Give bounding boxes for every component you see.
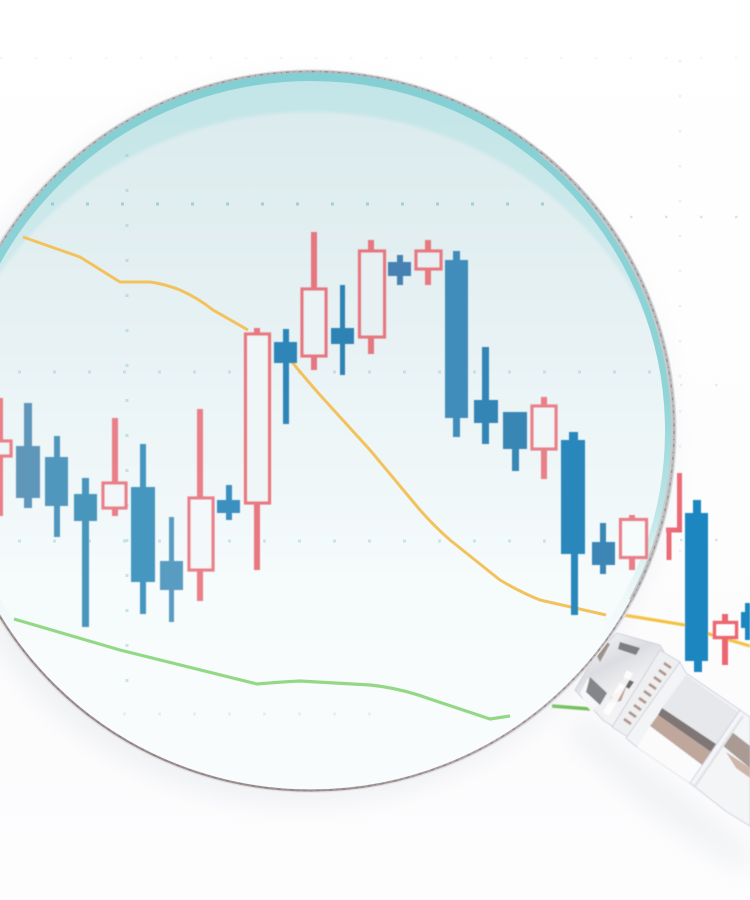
glass base bbox=[0, 71, 675, 791]
red candle 14 bbox=[360, 240, 384, 354]
handle shadow bbox=[575, 710, 750, 875]
blue candle 22 bbox=[592, 523, 615, 574]
blue candle outside lens bbox=[685, 500, 708, 672]
inner glass band bbox=[0, 81, 643, 310]
blue candle 17 bbox=[445, 251, 468, 437]
red candle 10 bbox=[246, 328, 270, 570]
blue candle 3 bbox=[45, 436, 68, 537]
red candle 5 bbox=[103, 418, 126, 516]
green moving average outside lens bbox=[552, 706, 590, 709]
blue candle 19 bbox=[503, 412, 527, 471]
blue candle 18 bbox=[474, 347, 498, 444]
yellow moving average in lens bbox=[23, 237, 606, 615]
dot grid inside lens bbox=[18, 154, 660, 714]
silver rim on right side bbox=[540, 152, 674, 600]
lens shadow bbox=[0, 82, 668, 802]
red candle 16 bbox=[416, 240, 441, 285]
handle barrel bbox=[626, 662, 740, 783]
blue candle 7 bbox=[160, 517, 183, 622]
blue candle 4 bbox=[74, 478, 97, 627]
handle collar bbox=[575, 633, 667, 733]
knurled ring bbox=[612, 650, 680, 737]
red candle 8 bbox=[189, 409, 213, 601]
blue candle 2 bbox=[16, 403, 40, 508]
teal edge ring bbox=[0, 72, 672, 598]
blue candle 13 bbox=[331, 285, 354, 375]
blue candle 6 bbox=[131, 444, 155, 614]
blue candle 15 bbox=[388, 255, 411, 285]
green moving average in lens bbox=[14, 619, 510, 719]
red candle 1 bbox=[0, 398, 11, 516]
bottom glass fill bbox=[0, 640, 690, 800]
red candle 20 bbox=[532, 397, 556, 479]
rim speckles bbox=[0, 72, 674, 790]
blue candle 21 bbox=[561, 432, 585, 615]
red hollow candle outside lens bbox=[714, 614, 736, 665]
red candle 23 bbox=[620, 515, 646, 570]
red candle distorted by lens edge bbox=[666, 473, 680, 560]
yellow moving average outside lens bbox=[605, 612, 750, 646]
chart outside the lens bbox=[552, 473, 750, 709]
dot grid on paper bbox=[0, 58, 750, 560]
blue candle at right edge bbox=[741, 603, 750, 640]
handle end section bbox=[690, 710, 750, 826]
main glass surface bbox=[0, 112, 665, 640]
blue candle 11 bbox=[274, 329, 297, 424]
lens rim line bbox=[0, 72, 674, 790]
candlesticks in lens bbox=[0, 232, 646, 627]
red candle 12 bbox=[302, 232, 326, 370]
lens glass bbox=[0, 72, 672, 721]
magnifying glass handle bbox=[575, 633, 750, 826]
lens backing bbox=[0, 70, 676, 792]
blue candle 9 bbox=[217, 485, 240, 520]
